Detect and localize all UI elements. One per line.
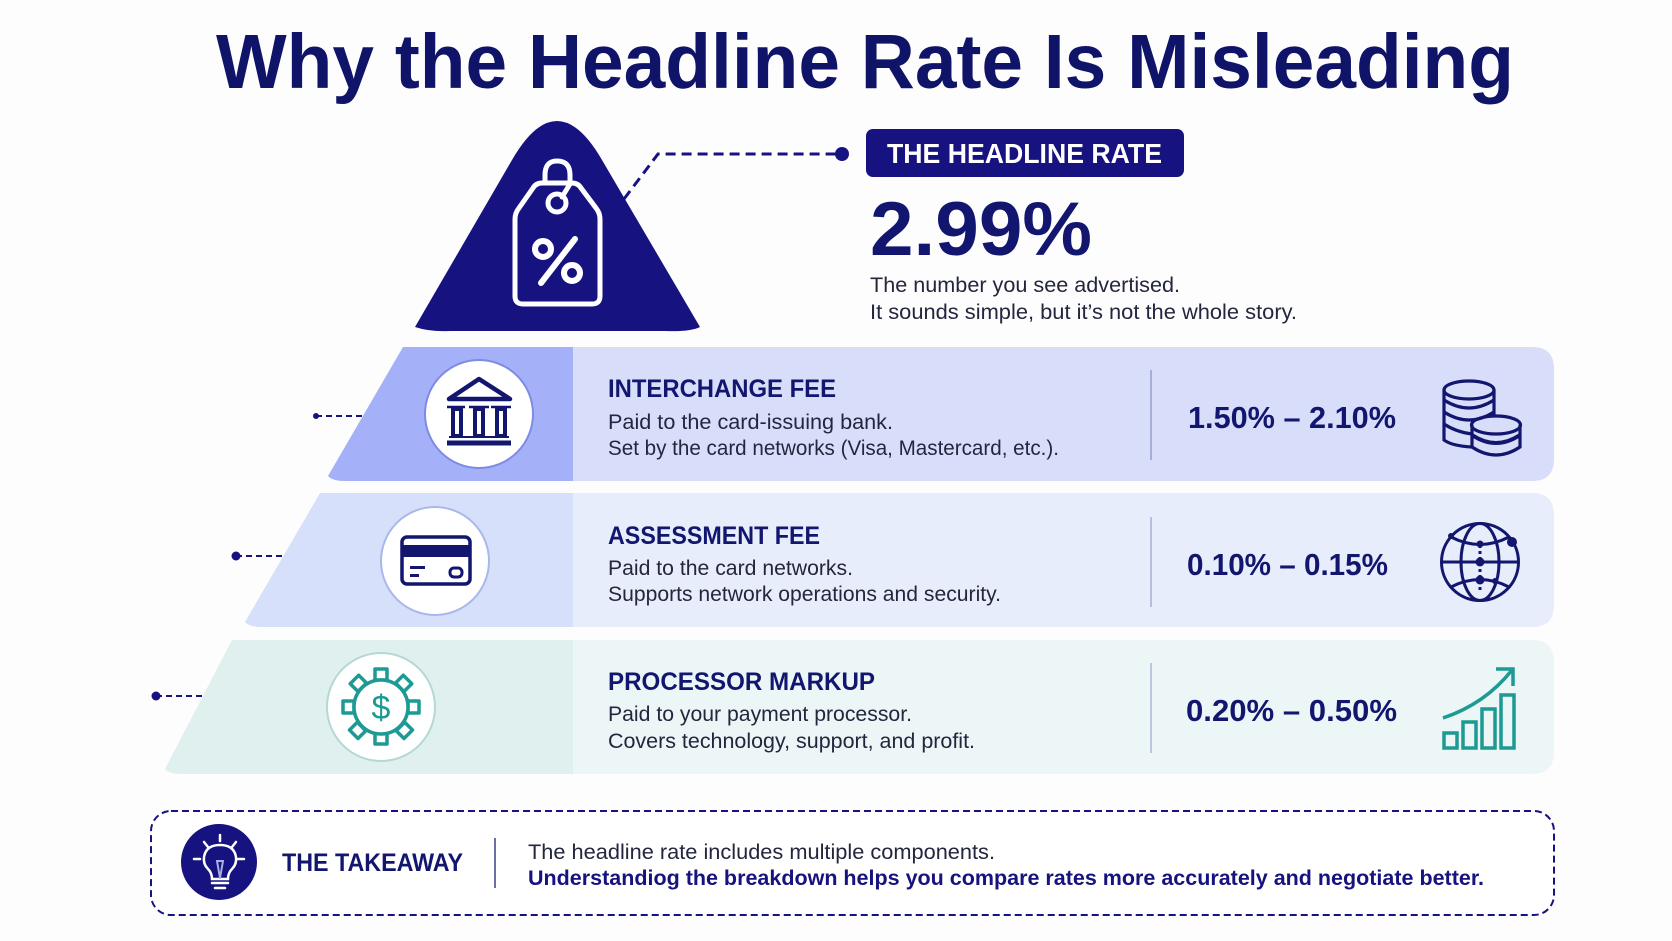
- badge: the headline rate: [866, 129, 1184, 177]
- headline description: [870, 274, 1297, 324]
- value: 0.20% – 0.50%: [1186, 693, 1397, 728]
- headline description: It sounds simple, but it’s not the whole story.: [870, 301, 1297, 324]
- description: Paid to the card networks.: [608, 557, 853, 580]
- heading: INTERCHANGE FEE: [608, 375, 836, 403]
- description: Covers technology, support, and profit.: [608, 730, 975, 753]
- icon: globe: [1442, 524, 1518, 600]
- icon: dollar gear: $: [372, 689, 391, 727]
- heading: PROCESSOR MARKUP: [608, 668, 875, 696]
- callout: the takeaway: [151, 811, 1554, 915]
- description: [608, 557, 1001, 606]
- icon: growth chart: [1443, 669, 1514, 748]
- leader dash: [232, 552, 283, 560]
- leader dash: [152, 692, 203, 700]
- panel: assessment fee: [232, 493, 1554, 627]
- value: 1.50% – 2.10%: [1188, 400, 1396, 435]
- takeaway label: THE TAKEAWAY: [282, 849, 463, 877]
- panel: processor markup: [152, 640, 1554, 774]
- headline description: The number you see advertised.: [870, 274, 1180, 297]
- description: Paid to the card-issuing bank.: [608, 411, 893, 434]
- panel: interchange fee: [313, 347, 1554, 481]
- icon: credit card: [381, 507, 489, 615]
- leader dash: [313, 413, 363, 419]
- value: 0.10% – 0.15%: [1187, 547, 1388, 582]
- description: Paid to your payment processor.: [608, 703, 912, 726]
- pyramid top: headline rate triangle with price tag: [415, 121, 700, 331]
- icon: coins: [1444, 381, 1520, 456]
- description: Supports network operations and security.: [608, 583, 1001, 606]
- title: Why the Headline Rate Is Misleading: [216, 19, 1514, 105]
- takeaway text: [528, 841, 1484, 890]
- badge: the headline rate: THE HEADLINE RATE: [887, 138, 1162, 169]
- icon: light bulb: [181, 824, 257, 900]
- headline value: 2.99%: [870, 187, 1092, 272]
- icon: bank: [425, 360, 533, 468]
- takeaway text: The headline rate includes multiple components.: [528, 841, 995, 864]
- takeaway text: Understandiog the breakdown helps you compare rates more accurately and negotiate better.: [528, 867, 1484, 890]
- description: Set by the card networks (Visa, Mastercard, etc.).: [608, 437, 1059, 460]
- description: [608, 703, 975, 753]
- icon: percent price tag: [515, 161, 600, 304]
- icon: dollar gear: [327, 653, 435, 761]
- description: [608, 411, 1059, 460]
- connector: triangle to headline rate: [624, 147, 849, 199]
- heading: ASSESSMENT FEE: [608, 522, 820, 550]
